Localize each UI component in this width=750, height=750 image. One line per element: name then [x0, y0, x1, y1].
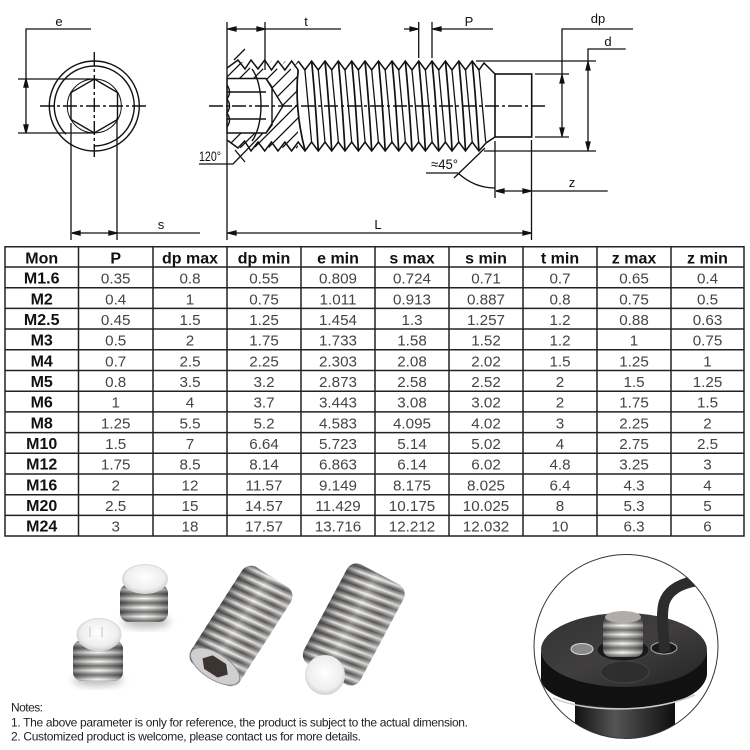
table values: 0.8: [105, 374, 126, 391]
notes: Notes:: [11, 700, 43, 714]
table values: 5.5: [179, 415, 201, 432]
table values: 9.149: [319, 477, 357, 494]
table values: 1.5: [623, 374, 645, 391]
table values: 0.63: [693, 312, 722, 329]
inset circle border: [534, 554, 718, 738]
table values: 0.4: [105, 291, 126, 308]
table values: 3: [556, 415, 564, 432]
table values: 14.57: [245, 498, 283, 515]
size column: M16: [26, 477, 57, 494]
table values: 0.55: [249, 271, 279, 288]
size column: M1.6: [24, 271, 60, 288]
table values: 0.724: [393, 271, 431, 288]
table values: 6.02: [471, 457, 501, 474]
table values: 0.75: [693, 333, 722, 350]
table values: 17.57: [245, 519, 283, 536]
angle 120 callout: 120°: [199, 148, 221, 164]
table values: [101, 271, 722, 536]
table header row: P: [110, 250, 121, 267]
table values: 6.4: [549, 477, 571, 494]
table values: 5.723: [319, 436, 357, 453]
dimension L: L: [374, 217, 382, 232]
hex key: [662, 581, 695, 652]
photo: long screw with white ball tip: [299, 560, 409, 695]
hex socket: [71, 79, 118, 133]
outer circle: [49, 61, 139, 151]
dimension dp: dp: [591, 11, 605, 26]
table values: 12: [182, 477, 198, 494]
table values: 1.52: [471, 333, 501, 350]
mount disk top: [541, 613, 707, 687]
table values: 11.429: [315, 498, 361, 515]
table values: 10: [552, 519, 568, 536]
table values: 0.7: [549, 271, 571, 288]
table values: 2.58: [397, 374, 427, 391]
dimension t: t: [304, 14, 308, 29]
table values: 0.5: [697, 291, 718, 308]
table values: 5: [703, 498, 712, 515]
dimension s: [71, 118, 200, 240]
table values: 2.873: [319, 374, 357, 391]
table values: 0.5: [105, 333, 126, 350]
table values: 6.64: [249, 436, 279, 453]
table values: 1.2: [549, 312, 571, 329]
size column: M4: [31, 353, 53, 370]
dimension table: [5, 247, 744, 536]
dimension L: [227, 217, 531, 235]
table values: 6.14: [397, 457, 427, 474]
table values: 5.14: [397, 436, 427, 453]
table header row: s min: [465, 250, 507, 267]
table values: 8: [556, 498, 564, 515]
dimension P: P: [465, 14, 473, 29]
dimension t: [227, 14, 341, 240]
table values: 5.02: [471, 436, 501, 453]
table values: 2.25: [619, 415, 649, 432]
table header row: Mon: [25, 250, 58, 267]
table values: 6: [703, 519, 712, 536]
table values: 13.716: [315, 519, 361, 536]
dimension z: [495, 140, 608, 240]
table values: 4: [186, 395, 194, 412]
table values: 0.887: [467, 291, 505, 308]
size column: M10: [26, 436, 57, 453]
table values: 2.25: [249, 353, 279, 370]
table values: 12.212: [389, 519, 435, 536]
bottom thread outline: [227, 137, 495, 151]
table values: 10.025: [463, 498, 509, 515]
helical root lines: [305, 70, 486, 142]
table values: 1.733: [319, 333, 357, 350]
table values: 1.25: [101, 415, 130, 432]
table values: 4.095: [393, 415, 431, 432]
table values: 1: [703, 353, 712, 370]
photo: short screw with white tip, rear: [120, 564, 170, 628]
table values: 2.08: [397, 353, 427, 370]
table header row: dp min: [238, 250, 290, 267]
top thread outline: [227, 60, 495, 74]
size column: M5: [31, 374, 53, 391]
table values: 0.45: [101, 312, 130, 329]
table values: 3.7: [253, 395, 275, 412]
table values: 7: [186, 436, 194, 453]
photo: screw in mount, round inset: [534, 554, 718, 745]
helical crest lines: [297, 61, 479, 151]
dimension d: d: [604, 34, 612, 49]
table values: 3.443: [319, 395, 357, 412]
notes: [11, 700, 468, 744]
notes: 1. The above parameter is only for reference, the product is subject to the actual dimension.: [11, 716, 468, 730]
table values: 1.454: [319, 312, 357, 329]
table values: 11.57: [246, 477, 282, 494]
table values: 6.3: [623, 519, 645, 536]
table values: 1: [630, 333, 638, 350]
mounted screw: [603, 616, 643, 657]
mount disk side: [541, 652, 707, 708]
table header row: e min: [317, 250, 359, 267]
table values: 8.175: [393, 477, 431, 494]
socket circle: [67, 79, 121, 133]
table values: 0.913: [393, 291, 431, 308]
table values: 2.303: [319, 353, 357, 370]
table values: 4: [556, 436, 564, 453]
dimension z: z: [569, 175, 575, 190]
table values: 2.52: [471, 374, 501, 391]
table values: 0.8: [179, 271, 201, 288]
table values: 8.5: [179, 457, 201, 474]
size column: M20: [26, 498, 57, 515]
table values: 2: [556, 395, 564, 412]
table values: 15: [182, 498, 198, 515]
table values: 2.5: [697, 436, 718, 453]
table header row: t min: [541, 250, 579, 267]
angle 45 callout: ≈45°: [431, 156, 458, 172]
socket inner lines: [227, 69, 272, 141]
size column: M24: [26, 519, 57, 536]
table values: 4.583: [319, 415, 357, 432]
table values: 0.71: [471, 271, 501, 288]
sectioned head hatch: [228, 61, 298, 149]
mount column: [575, 702, 675, 738]
table header row: dp max: [162, 250, 218, 267]
side view centre line: [209, 105, 548, 107]
table values: 12.032: [463, 519, 509, 536]
table values: 3: [111, 519, 120, 536]
table values: 4.8: [549, 457, 571, 474]
table values: 2: [111, 477, 120, 494]
table values: 18: [182, 519, 198, 536]
table values: 1.5: [549, 353, 571, 370]
dimension s: s: [158, 217, 165, 232]
table values: 10.175: [389, 498, 435, 515]
size column: [24, 271, 60, 536]
dimension d: [476, 34, 626, 151]
size column: M2: [31, 291, 53, 308]
table values: 1.25: [693, 374, 722, 391]
table values: 1.011: [320, 291, 356, 308]
table values: 8.025: [467, 477, 505, 494]
size column: M2.5: [24, 312, 60, 329]
hex socket section: [227, 78, 283, 133]
table values: 1.5: [105, 436, 126, 453]
small socket bolt: [571, 644, 593, 654]
end view drawing: [18, 14, 200, 240]
dimension P: [404, 14, 493, 58]
size column: M3: [31, 333, 53, 350]
table values: 2: [556, 374, 564, 391]
table values: 2: [703, 415, 712, 432]
table values: 2.5: [179, 353, 201, 370]
dog point: [495, 74, 532, 137]
table values: 2.5: [105, 498, 126, 515]
table values: 1.2: [549, 333, 571, 350]
table values: 2: [186, 333, 194, 350]
table values: 3.5: [179, 374, 201, 391]
notes: 2. Customized product is welcome, please contact us for more details.: [11, 730, 361, 744]
table values: 5.2: [253, 415, 275, 432]
table header row: [25, 250, 728, 267]
table values: 1.25: [619, 353, 649, 370]
table values: 1.25: [249, 312, 279, 329]
table values: 1.75: [619, 395, 649, 412]
table header row: z min: [687, 250, 728, 267]
angle 120 callout: [199, 49, 263, 164]
table values: 8.14: [249, 457, 279, 474]
table values: 4.3: [623, 477, 645, 494]
table values: 1: [186, 291, 194, 308]
table values: 1.58: [397, 333, 427, 350]
table values: 0.7: [105, 353, 126, 370]
table values: 1.257: [467, 312, 505, 329]
table values: 3: [703, 457, 712, 474]
table values: 1.75: [249, 333, 279, 350]
table values: 0.809: [319, 271, 357, 288]
size column: M6: [31, 395, 53, 412]
dimension e: e: [55, 14, 63, 29]
table values: 0.88: [619, 312, 649, 329]
table values: 3.08: [397, 395, 427, 412]
size column: M12: [26, 457, 57, 474]
table values: 1: [111, 395, 120, 412]
table values: 0.65: [619, 271, 649, 288]
table values: 4.02: [471, 415, 501, 432]
table values: 2.75: [619, 436, 649, 453]
table values: 1.5: [697, 395, 718, 412]
table values: 0.4: [697, 271, 718, 288]
table header row: z max: [612, 250, 656, 267]
table values: 0.35: [101, 271, 130, 288]
table values: 1.3: [401, 312, 423, 329]
table values: 2.02: [471, 353, 501, 370]
table grid: [5, 247, 744, 536]
table values: 0.75: [619, 291, 649, 308]
table values: 0.75: [249, 291, 279, 308]
table values: 3.2: [253, 374, 275, 391]
inner thread arc: [54, 66, 134, 146]
table values: 3.02: [471, 395, 501, 412]
photo: long screw with hex socket: [184, 562, 297, 693]
table values: 1.75: [101, 457, 130, 474]
table values: 0.8: [549, 291, 571, 308]
dimension dp: [535, 11, 633, 137]
size column: M8: [31, 415, 53, 432]
angle 45 callout: [426, 148, 495, 188]
photo: short screw with white tip, front: [73, 618, 123, 686]
table values: 3.25: [619, 457, 649, 474]
table values: 1.5: [179, 312, 201, 329]
side view drawing: [199, 14, 633, 240]
end view centre lines: [40, 52, 147, 157]
table values: 4: [703, 477, 712, 494]
table values: 6.863: [319, 457, 357, 474]
table header row: s max: [389, 250, 435, 267]
dimension e: [18, 14, 94, 133]
table values: 5.3: [623, 498, 645, 515]
